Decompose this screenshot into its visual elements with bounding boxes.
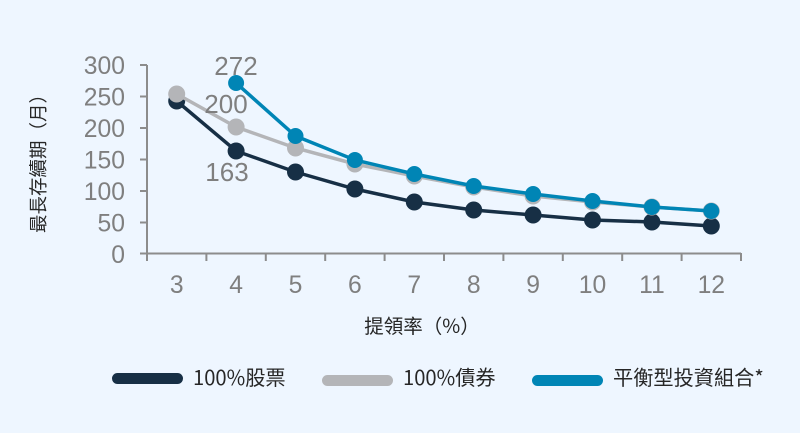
x axis labels: 4 [229, 272, 243, 299]
x axis labels [170, 272, 725, 299]
legend: 100% bonds: 100%債券 [403, 362, 496, 391]
y axis labels [84, 53, 125, 269]
legend: 100% stocks: 100%股票 [193, 362, 286, 391]
x axis title: 提領率（%） [364, 310, 480, 339]
x axis labels: 11 [639, 272, 665, 299]
y axis labels: 300 [84, 53, 125, 80]
x axis [140, 253, 741, 261]
y axis labels: 50 [98, 210, 125, 238]
x axis labels: 7 [407, 272, 421, 299]
x axis labels: 10 [579, 272, 606, 299]
y axis labels: 0 [111, 242, 125, 269]
y axis title: 最長存續期（月） [25, 85, 51, 233]
series: balanced portfolio [228, 75, 719, 219]
x axis labels: 8 [467, 272, 481, 299]
y axis [140, 65, 147, 254]
y axis labels: 250 [84, 84, 125, 112]
data labels: 200 [204, 89, 248, 119]
data labels [204, 51, 258, 187]
y axis labels: 100 [84, 179, 125, 206]
x axis labels: 5 [289, 272, 302, 299]
series: 100% stocks [168, 92, 720, 234]
legend: balanced portfolio [532, 362, 764, 391]
y axis labels: 200 [84, 116, 125, 143]
legend: 100% stocks [112, 362, 286, 391]
x axis labels: 9 [526, 272, 540, 299]
legend: 100% bonds [322, 362, 496, 391]
y axis labels: 150 [84, 148, 125, 174]
data labels: 163 [205, 157, 249, 187]
series: 100% bonds [168, 86, 720, 220]
legend: balanced portfolio: 平衡型投資組合* [613, 362, 764, 391]
data labels: 272 [214, 51, 258, 81]
x axis labels: 3 [170, 272, 184, 299]
x axis labels: 12 [698, 272, 725, 299]
x axis labels: 6 [348, 272, 362, 299]
